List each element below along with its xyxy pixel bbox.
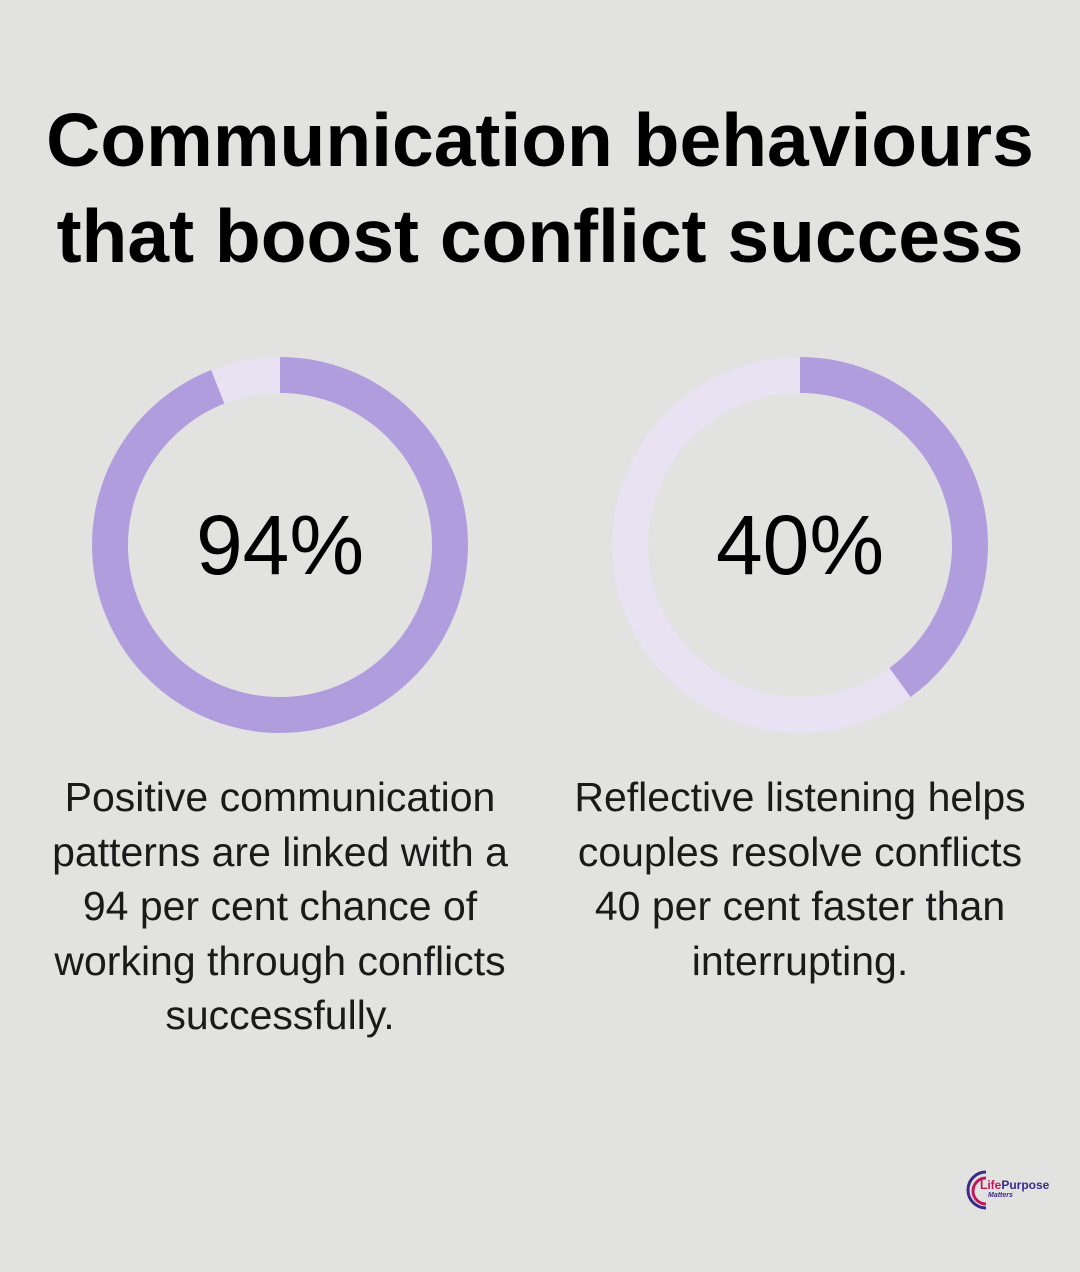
title: that boost conflict success	[57, 194, 1023, 278]
chart: 40% ring: 40%	[716, 498, 884, 592]
logo: Matters	[988, 1192, 1013, 1199]
text: 40% description: interrupting.	[692, 938, 908, 984]
text: 40% description: 40 per cent faster than	[595, 883, 1005, 929]
chart: 94% ring: 94%	[196, 498, 364, 592]
text: 40% description: couples resolve conflicts	[578, 828, 1022, 874]
text: 40% description: Reflective listening helps	[574, 774, 1026, 820]
title	[46, 98, 1034, 278]
chart: 40% ring	[612, 357, 988, 733]
text: 94% description: patterns are linked with a	[52, 828, 508, 874]
chart: 94% ring	[92, 357, 468, 733]
logo: LifePurpose	[980, 1178, 1049, 1192]
text: 94% description: 94 per cent chance of	[83, 883, 477, 929]
title: Communication behaviours	[46, 98, 1034, 182]
logo	[966, 1170, 1049, 1210]
text: 40% description	[574, 774, 1026, 984]
text: 94% description	[52, 774, 508, 1038]
text: 94% description: successfully.	[165, 992, 395, 1038]
text: 94% description: working through conflicts	[54, 938, 506, 984]
text: 94% description: Positive communication	[65, 774, 495, 820]
